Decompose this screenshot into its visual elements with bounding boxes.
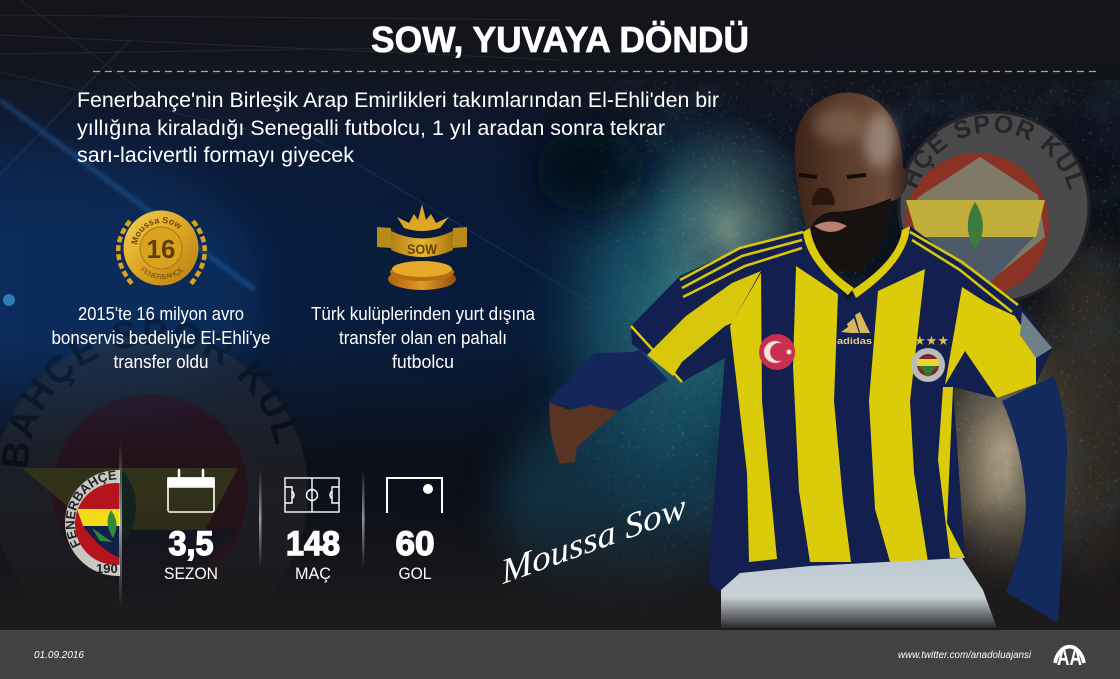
crest, upper right: HÇE SPOR KUL [907, 115, 1082, 190]
icon: AA logo: AA [1057, 644, 1082, 671]
near arm sleeve [549, 350, 668, 412]
club crest, half [65, 470, 120, 576]
icon: pitch [285, 478, 339, 512]
intro text: sarı-lacivertli formayı giyecek [77, 144, 355, 167]
jersey stripes [730, 266, 1036, 562]
stat: matches [285, 478, 340, 583]
dashed divider [93, 70, 1100, 72]
adidas logo [837, 312, 872, 347]
signature: Moussa Sow [498, 487, 688, 592]
stat: seasons: SEZON [164, 564, 218, 583]
intro text [77, 89, 719, 167]
stat: matches: 148 [286, 525, 340, 563]
cloud texture [573, 80, 1120, 578]
adidas logo: adidas [837, 336, 872, 347]
icon: gold medal: 16 [147, 234, 175, 264]
sleeve badge [1020, 312, 1052, 358]
twitter url: www.twitter.com/anadoluajansi [898, 650, 1032, 661]
caption: transfer fee: 2015'te 16 milyon avro [78, 304, 244, 324]
hand [549, 403, 618, 464]
icon: gold medal: Moussa Sow [131, 217, 182, 244]
stat: goals [387, 478, 442, 583]
crown [397, 204, 449, 231]
club badge and stars: ★★★ [914, 333, 949, 348]
stat: seasons: 3,5 [168, 525, 214, 563]
crest, upper right [898, 110, 1090, 300]
divider 3 [362, 470, 364, 568]
nebula: beige [910, 240, 1120, 630]
title: SOW, YUVAYA DÖNDÜ [371, 19, 749, 60]
turkish flag badge [759, 334, 795, 370]
big faded crest, lower left [0, 318, 308, 576]
shoulder stripes left [680, 232, 803, 297]
club crest, half: 190 [96, 561, 118, 576]
caption: transfer fee: bonservis bedeliyle El-Ehli'ye [52, 328, 270, 348]
scalp highlight [814, 107, 896, 168]
intro text: yıllığına kiraladığı Senegalli futbolcu, 1 yıl aradan sonra tekrar [77, 117, 665, 140]
caption: most expensive [311, 304, 536, 372]
shorts [721, 558, 997, 628]
icon: crown trophy [377, 204, 467, 290]
jersey base [631, 226, 1052, 591]
base [388, 268, 456, 290]
stat: goals: GOL [398, 564, 432, 583]
icon: calendar [168, 470, 214, 512]
club crest, half: FENERBAHÇE S [66, 470, 116, 548]
shoulder stripes right [910, 232, 1018, 312]
stat: matches: MAÇ [295, 564, 331, 583]
divider 2 [259, 470, 262, 568]
caption: transfer fee [52, 304, 270, 372]
caption: most expensive: transfer olan en pahalı [339, 328, 507, 348]
icon: gold medal [116, 210, 208, 286]
date: 01.09.2016 [34, 650, 84, 661]
face detail [799, 175, 891, 272]
lower dark fade [0, 500, 1120, 630]
footer bar [0, 630, 1120, 679]
icon: crown trophy: SOW [407, 241, 438, 257]
divider 1 [119, 442, 122, 607]
sleeve cuff [631, 326, 682, 382]
stat: goals: 60 [396, 525, 434, 563]
head [795, 92, 909, 271]
player [549, 92, 1067, 628]
collar [803, 226, 910, 298]
caption: transfer fee: transfer oldu [114, 352, 208, 372]
banner [377, 227, 467, 248]
icon: goal and ball [387, 478, 442, 513]
club badge and stars [911, 333, 949, 382]
jersey sleeve yellow left [647, 271, 761, 376]
light beams [0, 0, 620, 320]
caption: most expensive: Türk kulüplerinden yurt dışına [311, 304, 536, 324]
intro text: Fenerbahçe'nin Birleşik Arap Emirlikleri takımlarından El-Ehli'den bir [77, 89, 719, 112]
caption: most expensive: futbolcu [392, 352, 454, 372]
stat: seasons [164, 470, 218, 583]
icon: gold medal: FENERBAHÇE [140, 267, 184, 280]
blue dot [3, 294, 15, 306]
nebula: teal [500, 90, 840, 620]
big faded crest, lower left: BAHÇE SPOR KUL [2, 318, 296, 468]
far arm sleeve [1002, 376, 1067, 623]
